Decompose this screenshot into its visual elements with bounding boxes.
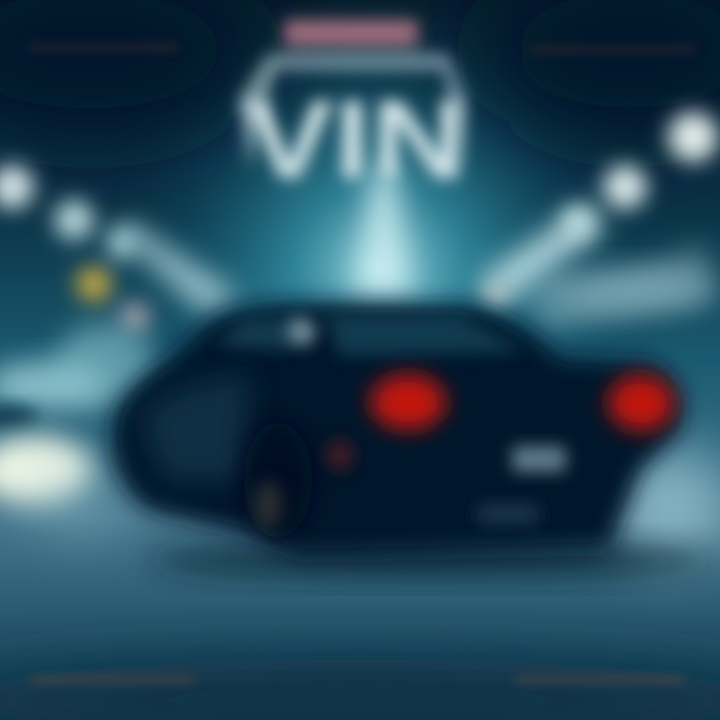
left taillight	[370, 374, 446, 430]
light beams	[115, 170, 720, 330]
rear wheel	[244, 422, 312, 538]
glowing icon nodes	[0, 112, 718, 332]
car shadow	[150, 542, 710, 578]
license plate	[512, 446, 566, 472]
mirror reflection	[288, 318, 316, 346]
right taillight	[608, 375, 674, 431]
car left flank	[140, 375, 250, 480]
rear window	[325, 315, 525, 356]
car	[112, 302, 710, 578]
lower plate glow	[478, 504, 538, 524]
title: VIN: VIN	[245, 77, 467, 202]
small red accent	[326, 439, 354, 471]
right side haze	[530, 268, 720, 560]
top banner and VIN frame	[238, 20, 466, 170]
side window	[215, 316, 305, 350]
car body	[112, 302, 682, 556]
left light haze	[0, 323, 155, 530]
